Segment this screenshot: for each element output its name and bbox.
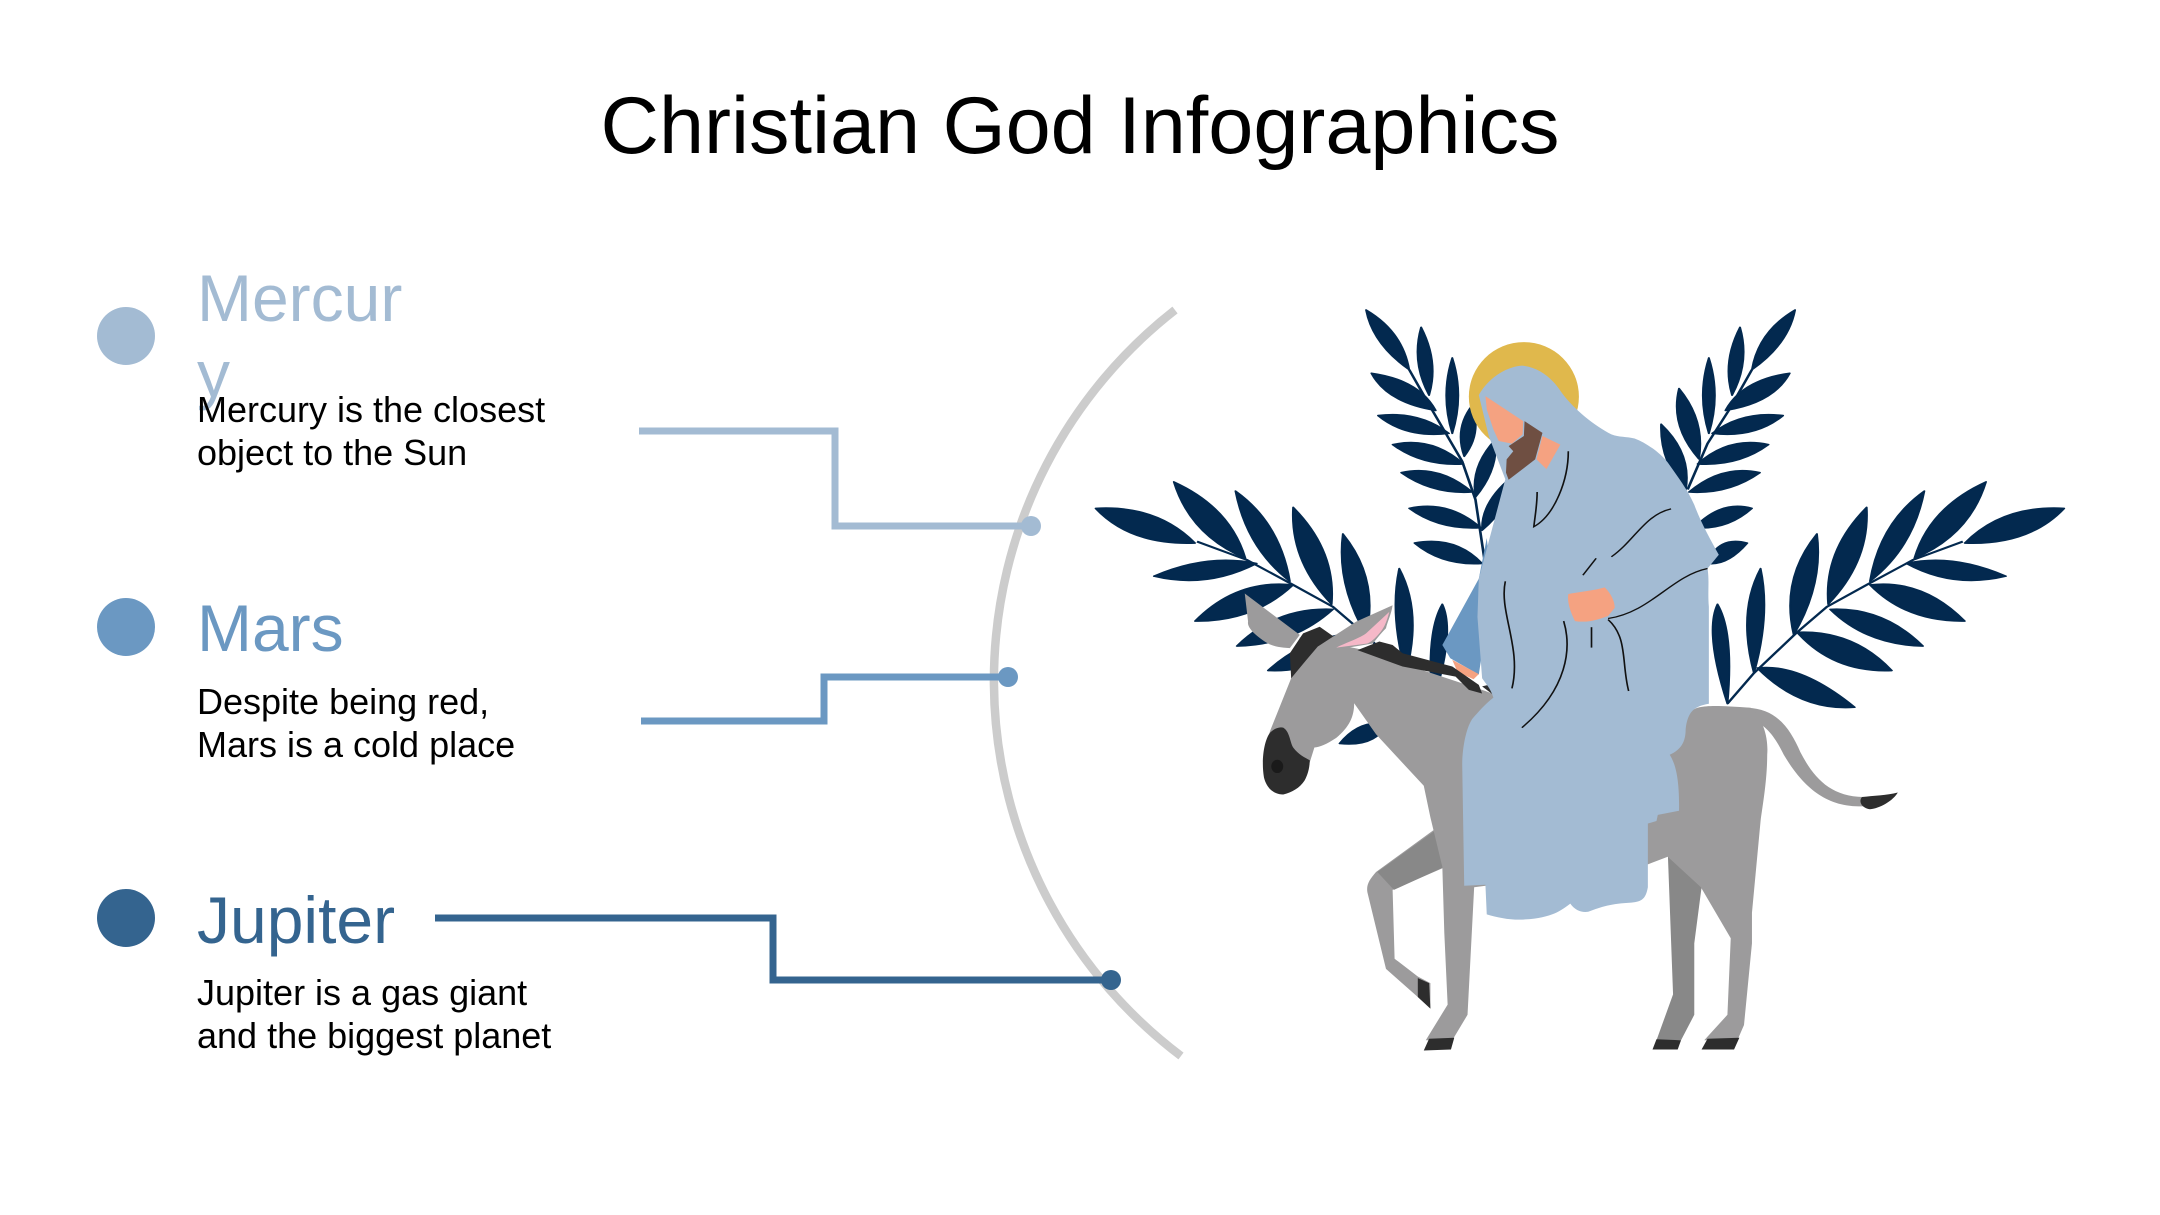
description: Jupiter: and the biggest planet: [197, 1015, 551, 1056]
far hind leg: [1656, 852, 1704, 1040]
tail: [1747, 708, 1863, 806]
marker: Mars: [97, 598, 155, 656]
hooves: [1424, 1038, 1739, 1050]
head and body: [1263, 637, 1767, 1040]
description: Mercury: Mercury is the closest: [197, 389, 545, 430]
nostril: [1271, 760, 1283, 773]
item: Mercury: [97, 261, 1041, 536]
marker: Mercury: [97, 307, 155, 365]
description: Mercury: object to the Sun: [197, 432, 467, 473]
face: [1485, 396, 1523, 444]
robe: [1462, 366, 1719, 920]
far front leg shading: [1377, 830, 1444, 890]
palm frond: upper left: [1366, 310, 1512, 566]
marker: Jupiter: [97, 889, 155, 947]
heading: Jupiter: Jupiter: [197, 883, 395, 957]
connector: Jupiter: [435, 918, 1121, 990]
donkey: [1245, 594, 1898, 1050]
robe folds: [1504, 451, 1708, 728]
tail tuft: [1860, 792, 1898, 809]
left ear: [1245, 594, 1300, 648]
inner ear: [1336, 612, 1389, 648]
hand on neck: [1452, 660, 1479, 679]
heading: Mercury: y: [197, 337, 230, 411]
description: Mars: Despite being red,: [197, 681, 489, 722]
fist: [1568, 587, 1615, 622]
palm frond: upper right: [1661, 310, 1795, 564]
sleeve inner lining: [1442, 538, 1492, 675]
connector: Mercury: [639, 431, 1041, 536]
title: Christian God Infographics: [600, 81, 1560, 171]
right ear: [1318, 605, 1393, 650]
grey arc: [994, 310, 1181, 1056]
heading: Mars: Mars: [197, 591, 344, 665]
heading: Mercury: Mercur: [197, 261, 402, 335]
description: Jupiter: Jupiter is a gas giant: [197, 972, 527, 1013]
neck: [1536, 436, 1560, 469]
far front leg: [1367, 826, 1446, 1009]
hoof: far front: [1418, 978, 1430, 1009]
beard: [1506, 421, 1542, 480]
connector: Mars: [641, 667, 1018, 721]
palm frond: lower right: [1713, 482, 2064, 708]
illustration: Jesus riding a donkey: [1096, 310, 2064, 1050]
description: Mars: Mars is a cold place: [197, 724, 515, 765]
halo: [1469, 342, 1579, 451]
mane: [1290, 627, 1503, 697]
item: Mars: [97, 591, 1018, 765]
palm frond: lower left: [1096, 482, 1447, 744]
muzzle: [1263, 727, 1310, 794]
item: Jupiter: [97, 883, 1121, 1056]
